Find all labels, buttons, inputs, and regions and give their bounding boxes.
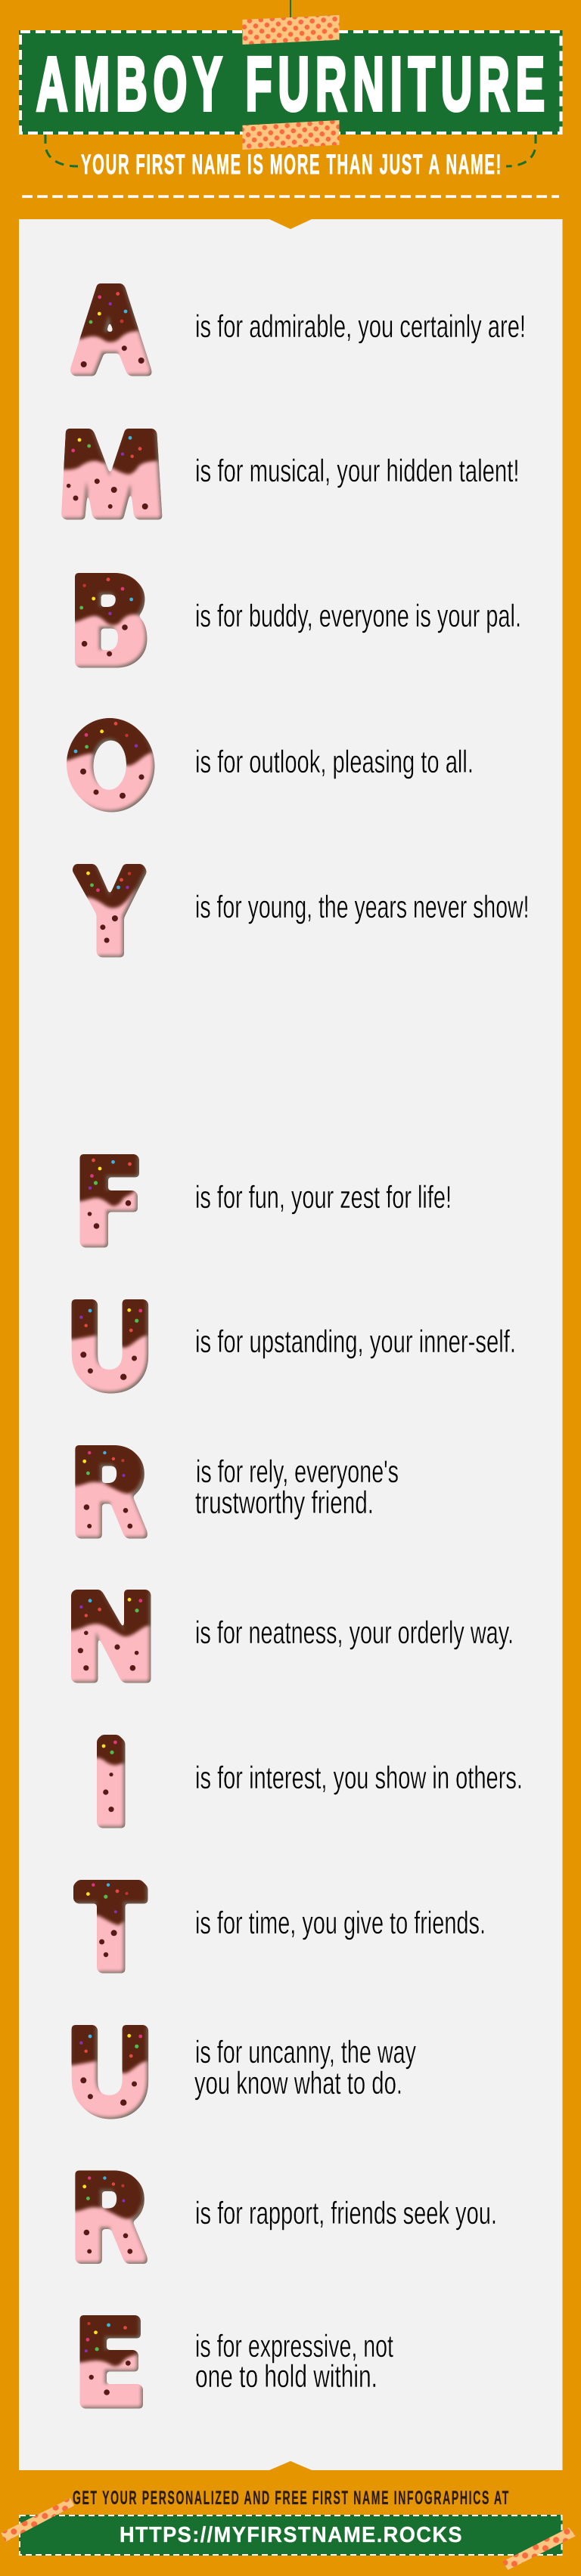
tape: footer left [2, 2498, 74, 2542]
text: U second: is for uncanny, the way [195, 2034, 416, 2070]
letter I [99, 1737, 123, 1826]
text: R [195, 1454, 399, 1520]
tape: bottom [242, 120, 339, 150]
footer banner [19, 2515, 563, 2556]
text: F: is for fun, your zest for life! [195, 1179, 452, 1215]
text: R: trustworthy friend. [195, 1485, 374, 1520]
letter Y [74, 866, 144, 955]
row: N [73, 1592, 514, 1681]
row: U [74, 1302, 516, 1391]
letter O [69, 720, 153, 810]
letter U [74, 1302, 146, 1391]
row: A [73, 286, 526, 373]
row: E [82, 2317, 393, 2407]
letter A [73, 286, 150, 373]
row: T [76, 1882, 486, 1971]
row: I [99, 1737, 523, 1826]
letter B [77, 575, 145, 665]
text: U second [194, 2034, 416, 2101]
letter R second [77, 2172, 145, 2262]
bracket: right [506, 135, 536, 166]
text: E [195, 2328, 393, 2394]
letter U second [74, 2027, 146, 2116]
row: M [64, 431, 519, 517]
bracket: left [45, 135, 78, 166]
text: R: is for rely, everyone's [196, 1454, 399, 1489]
row: U second [74, 2027, 416, 2116]
row: F [82, 1156, 452, 1246]
header banner [19, 30, 563, 135]
letter M [64, 431, 160, 517]
tape: top [242, 15, 339, 45]
hanging thread [290, 0, 291, 20]
letter N [73, 1592, 148, 1681]
tape: footer right [502, 2528, 576, 2570]
letter R [77, 1447, 145, 1536]
row: R [77, 1447, 399, 1536]
row: B [77, 575, 521, 665]
letter F [82, 1156, 137, 1246]
row: O [69, 720, 474, 810]
row: Y [74, 866, 530, 955]
footer url: HTTPS://MYFIRSTNAME.ROCKS [120, 2523, 463, 2547]
text: E: one to hold within. [195, 2358, 377, 2394]
text: E: is for expressive, not [195, 2328, 393, 2364]
text: U second: you know what to do. [194, 2065, 402, 2101]
letter E [82, 2317, 141, 2407]
row: R second [77, 2172, 497, 2262]
letter T [76, 1882, 145, 1971]
